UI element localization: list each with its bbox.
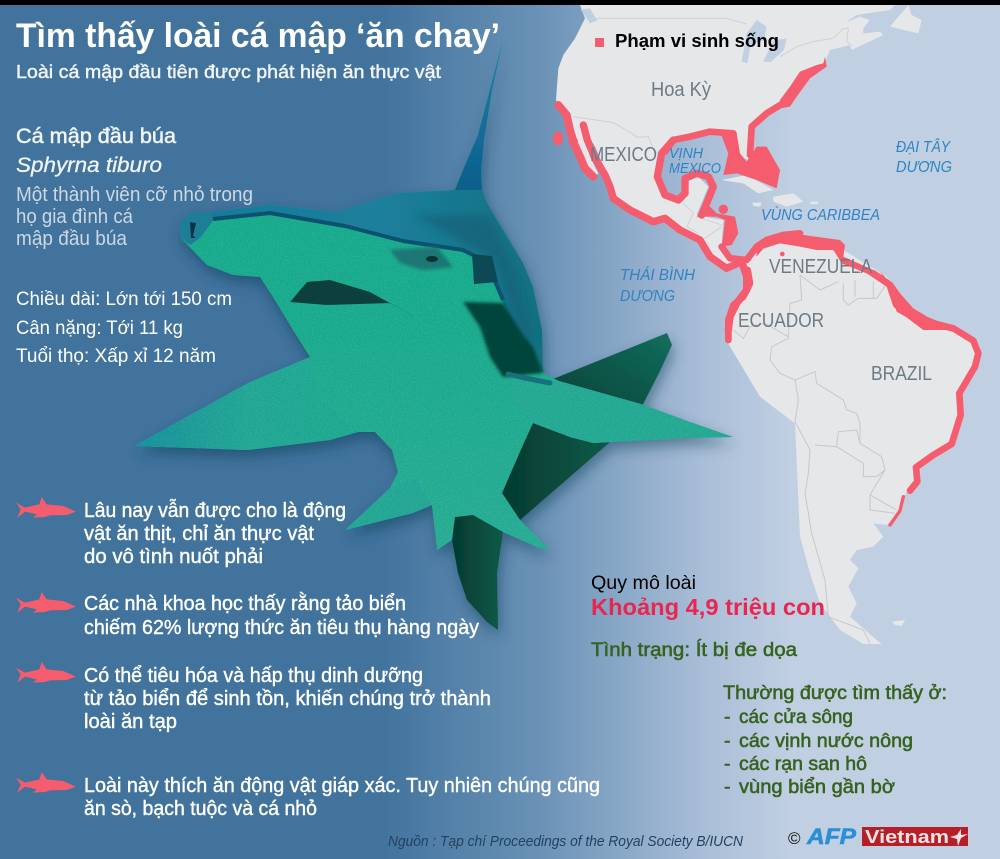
map labels: seas and oceans [620,137,952,305]
habitats list: các cửa sông [739,706,853,728]
North and Central America land [556,5,922,270]
subtitle: Loài cá mập đầu tiên được phát hiện ăn thực vật [16,62,441,82]
species name: Cá mập đầu búa [16,125,176,148]
logo: Vietnam+: Vietnam [865,827,949,847]
map labels: countries: Hoa Kỳ [651,79,711,101]
fact 4 [16,772,600,820]
icon: shark [16,497,76,518]
eye fold [472,254,498,284]
species description: Một thành viên cỡ nhỏ trong [16,184,253,206]
map labels: seas and oceans: VÙNG CARIBBEA [761,205,880,224]
habitats list: các rạn san hô [739,753,867,775]
ventral fin [345,478,432,530]
icon: shark [16,592,76,613]
logo: AFP: AFP [806,824,856,849]
head top shading [415,215,535,340]
species facts: Cân nặng: Tới 11 kg [16,318,183,339]
map labels: countries: VENEZUELA [769,256,873,278]
eye [426,256,438,262]
fact 3 [16,662,491,733]
nostril [190,222,196,238]
map labels: seas and oceans: MEXICO [669,160,721,177]
population scale: Quy mô loài [591,573,696,594]
far pectoral fin [548,333,672,412]
fact 1 [16,497,346,568]
habitats list: Thường được tìm thấy ở: [723,682,947,704]
map labels: countries: ECUADOR [738,310,824,332]
population scale [591,573,825,620]
fact 4: Loài này thích ăn động vật giáp xác. Tuy nhiên chúng cũng [84,775,600,797]
fact 4: ăn sò, bạch tuộc và cá nhỏ [84,798,317,820]
fact 2: Các nhà khoa học thấy rằng tảo biển [84,592,406,615]
map labels: seas and oceans: DƯƠNG [896,159,952,176]
fact 1: vật ăn thịt, chỉ ăn thực vật [84,523,314,545]
map labels: seas and oceans: ĐẠI TÂY [896,137,951,156]
fact 1: Lâu nay vẫn được cho là động [84,499,346,522]
map labels: seas and oceans: VỊNH [669,145,703,162]
map labels: countries: MEXICO [590,144,657,166]
fact 3: loài ăn tạp [84,711,177,733]
gill ridge [508,374,550,383]
title: Tìm thấy loài cá mập ‘ăn chay’ [16,17,500,55]
species description: họ gia đình cá [16,206,134,228]
map labels: seas and oceans: DƯƠNG [620,288,675,305]
skin speckle [136,116,732,550]
mouth [290,280,420,320]
eye patch [390,247,453,270]
head band dark edge [213,213,503,300]
logo: AFP: © [788,829,801,848]
shark illustration [130,35,740,635]
habitats list: các vịnh nước nông [739,730,913,752]
habitats list: - [724,730,730,752]
logo: AFP [788,824,856,849]
fact 2: chiếm 62% lượng thức ăn tiêu thụ hàng ngày [84,617,479,639]
top black bar [0,0,1000,5]
habitats list: - [724,706,730,728]
fact 3: Có thể tiêu hóa và hấp thụ dinh dưỡng [84,665,423,687]
population scale: Khoảng 4,9 triệu con [591,594,825,620]
icon: shark [16,662,76,683]
species name [16,125,176,177]
fact 3: từ tảo biển để sinh tồn, khiến chúng trở thành [84,688,491,710]
habitat range: South America coast [728,270,978,525]
fact 2 [16,592,479,639]
dark underside of near fin [502,423,610,520]
habitats list: vùng biển gần bờ [739,776,895,798]
habitats list: - [724,753,730,775]
snout [180,212,212,245]
map labels: seas and oceans: THÁI BÌNH [620,265,695,284]
left pectoral fin shading [134,357,358,450]
species facts [16,289,232,367]
habitat range: North and Central America coasts [553,57,960,330]
map labels: countries [590,79,932,385]
map labels: countries: BRAZIL [871,363,932,385]
South America land [725,240,980,644]
dorsal fin [455,40,503,190]
habitats list [723,682,947,798]
species facts: Chiều dài: Lớn tới 150 cm [16,289,232,310]
head top [188,190,543,373]
main body with fins [134,40,733,550]
clasper [452,510,503,630]
map: Americas with habitat range [553,5,980,644]
source: Nguồn : Tạp chí Proceedings of the Royal Society B/IUCN [388,833,743,850]
species name: Sphyrna tiburo [16,154,162,177]
logo: Vietnam+ [862,827,968,847]
species description: mập đầu búa [16,228,128,250]
conservation status: Tình trạng: Ít bị đe dọa [591,640,797,661]
icon: shark [16,772,76,793]
fact 1: do vô tình nuốt phải [84,546,263,568]
species facts: Tuổi thọ: Xấp xỉ 12 năm [16,346,216,367]
species description [16,184,253,250]
gills [463,302,543,377]
legend: habitat range: Phạm vi sinh sống [615,31,779,51]
right pectoral fin [510,376,733,443]
habitats list: - [724,776,730,798]
